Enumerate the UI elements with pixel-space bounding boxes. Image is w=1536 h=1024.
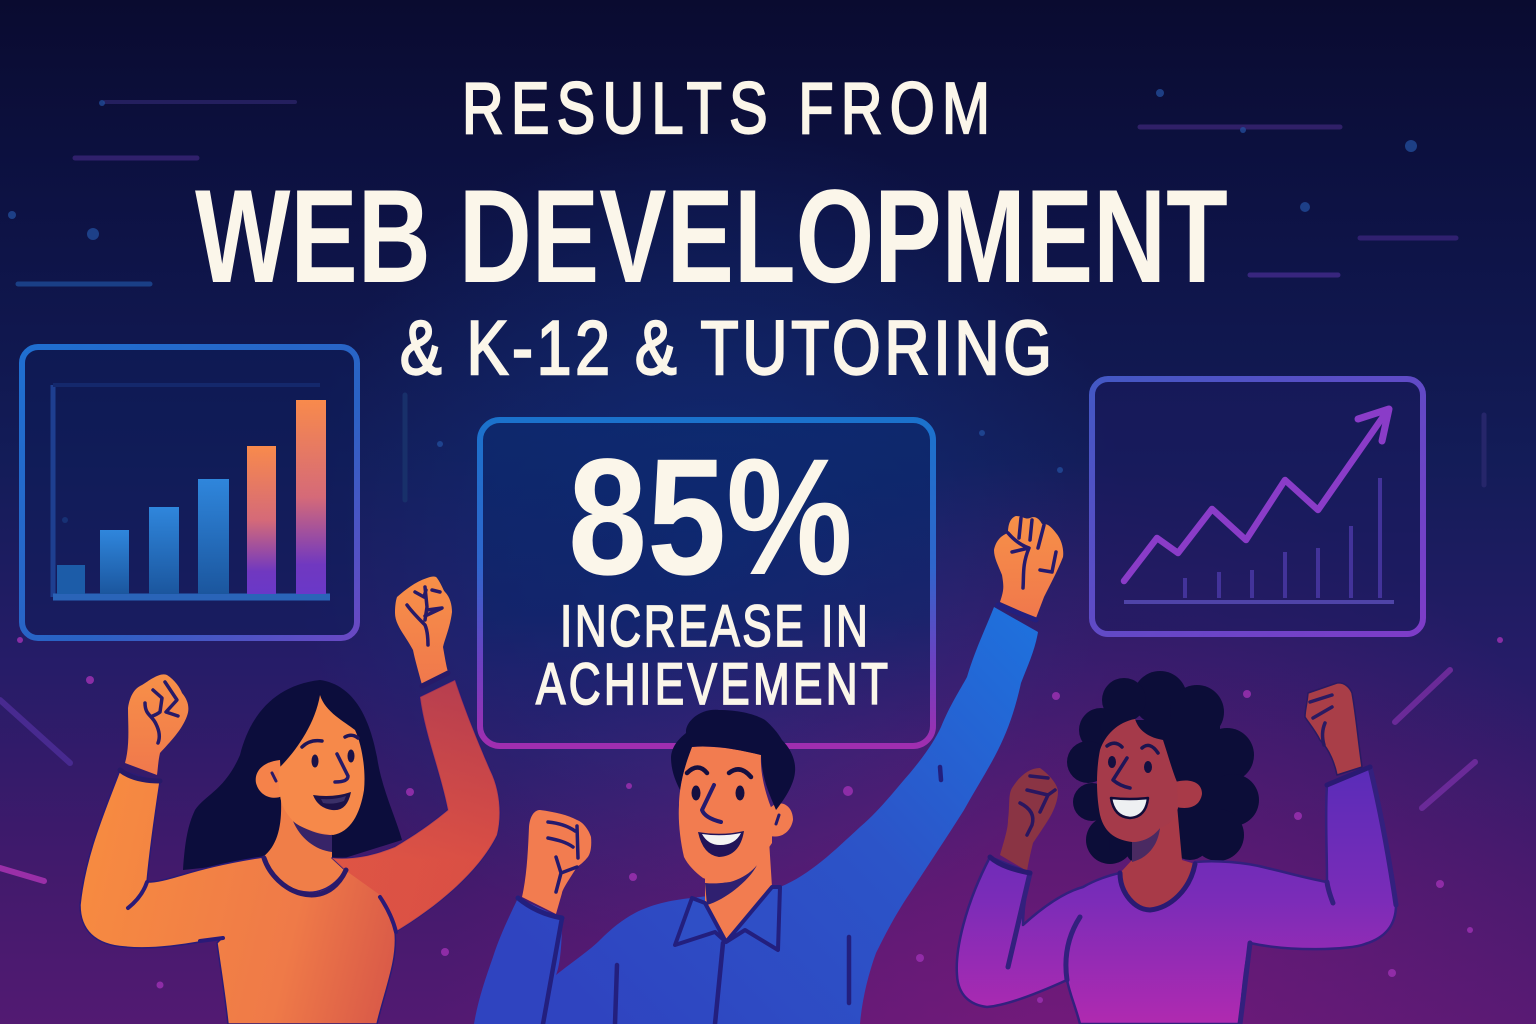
ear (1175, 780, 1202, 808)
sweater (957, 767, 1396, 1024)
fist lines left (1020, 776, 1055, 835)
face features (272, 735, 358, 810)
sweater creases (128, 882, 396, 941)
neck (1120, 805, 1195, 910)
fist lines right (1008, 518, 1056, 588)
fist lines right (1310, 695, 1332, 745)
cuff left (518, 898, 562, 918)
title (195, 68, 1228, 390)
face features (687, 768, 779, 857)
face (1097, 719, 1178, 842)
bars (57, 400, 326, 594)
heading line: k-12 and tutoring: & K-12 & TUTORING (400, 305, 1052, 390)
fist lines left (548, 822, 578, 892)
neck shadow (705, 865, 757, 905)
panel: line chart (1092, 379, 1423, 634)
collar (675, 887, 780, 950)
panel: bar chart (22, 347, 357, 638)
sweater creases (1008, 767, 1396, 1024)
neck (705, 840, 772, 940)
mini bars (1185, 478, 1380, 598)
cuff right (1327, 767, 1370, 785)
panel: 85 percent callout (480, 420, 933, 746)
face features (1107, 743, 1158, 818)
fist lines left (145, 682, 178, 743)
face (278, 695, 365, 835)
person: woman left (80, 576, 500, 1024)
shirt (474, 607, 1038, 1024)
cuff right (998, 605, 1036, 620)
red sleeve (332, 680, 500, 932)
collar (264, 858, 346, 895)
hair (183, 680, 402, 870)
hair (671, 710, 795, 810)
person: man center (474, 516, 1063, 1024)
fist lines right (407, 587, 442, 645)
caption line 1: INCREASE IN (560, 593, 868, 658)
face (679, 747, 772, 883)
shirt details (543, 767, 941, 1024)
caption line 2: ACHIEVEMENT (536, 651, 888, 716)
neck (263, 800, 347, 892)
cuff left (120, 770, 160, 781)
trend arrow (1124, 409, 1389, 581)
heading line: results from: RESULTS FROM (462, 68, 990, 148)
fist right (395, 576, 452, 685)
fist right (1305, 683, 1362, 775)
fist left (1000, 768, 1058, 871)
fist right (994, 516, 1063, 618)
fist left (125, 674, 188, 775)
ear (770, 803, 793, 837)
cuff left (990, 857, 1030, 873)
sweater (80, 680, 500, 1024)
neck shadow (293, 821, 332, 852)
ear (256, 760, 282, 798)
big number: 85% (568, 424, 853, 609)
collar (1120, 864, 1195, 910)
heading line: web development: WEB DEVELOPMENT (195, 163, 1228, 311)
person: woman right (957, 671, 1396, 1024)
neck shadow (1132, 828, 1160, 862)
cuff right (422, 673, 448, 686)
curly hair (1067, 671, 1259, 864)
fist left (522, 810, 591, 914)
